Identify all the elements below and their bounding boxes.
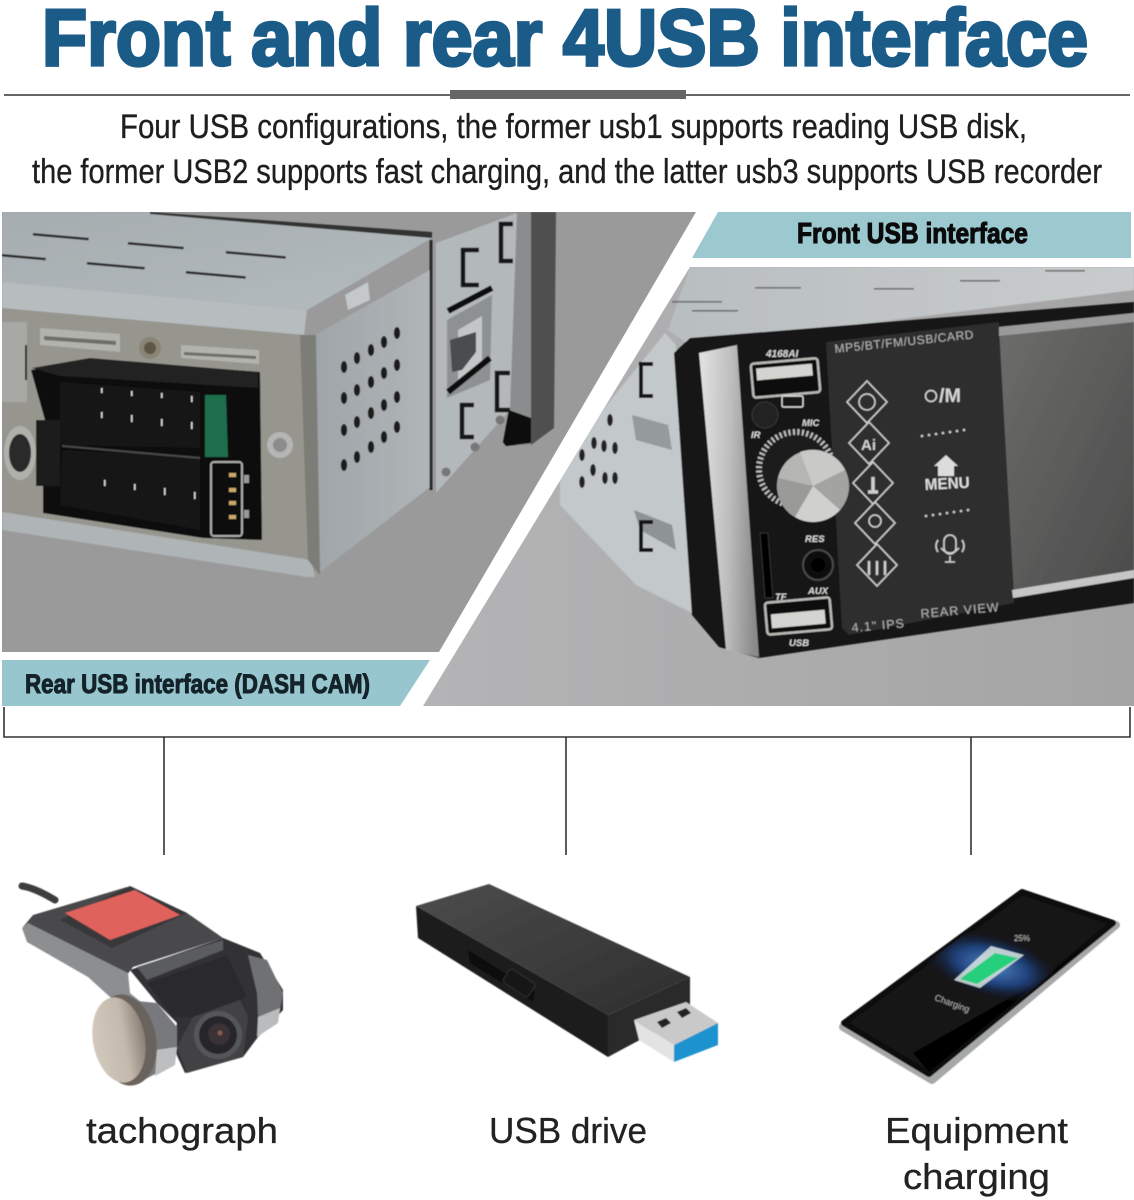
bottom spec text (851, 602, 999, 632)
rear USB port (211, 462, 249, 536)
drive top face (416, 884, 690, 1015)
green fuse (205, 395, 228, 457)
label: equipment charging (885, 1110, 1068, 1197)
model text: MP5/BT/FM/USB/CARD (834, 327, 975, 356)
battery icon (954, 946, 1024, 988)
power / M button: /M (939, 386, 961, 407)
control panel (826, 322, 1014, 635)
panel: rear USB photo (0, 212, 700, 654)
screen reflection (913, 925, 1110, 1072)
labels on front panel: TF (775, 592, 787, 603)
title rule (4, 90, 1130, 99)
label: USB drive: USB drive (489, 1110, 647, 1151)
bottom spec text: 4.1" IPS (851, 616, 905, 635)
bottom spec text: REAR VIEW (920, 600, 1000, 621)
labels on front panel: MIC (802, 418, 820, 429)
mounting bracket (436, 213, 517, 493)
banner: rear USB interface (2, 660, 430, 706)
icon: USB flash drive (416, 884, 718, 1062)
phone screen (844, 892, 1113, 1074)
panel: front USB photo (420, 267, 1134, 707)
drive end face (608, 977, 690, 1057)
dotted separators (921, 429, 969, 517)
camera mount and adhesive pad (22, 886, 223, 1007)
camera body (130, 938, 283, 1073)
banner: front USB interface: Front USB interface (797, 218, 1028, 250)
description text (32, 108, 1102, 191)
icon: dash camera (22, 886, 283, 1091)
chassis lid (2, 212, 432, 335)
labels on front panel: IR (751, 430, 761, 441)
camera cable (22, 886, 55, 900)
battery glow (928, 930, 1056, 1002)
banner: rear USB interface: Rear USB interface (DASH CAM) (25, 669, 370, 699)
silver side strip (699, 345, 759, 657)
camera lens (177, 1000, 248, 1073)
rear face plate (2, 308, 320, 577)
black bezel (674, 302, 1134, 658)
lid of front unit (668, 267, 1134, 345)
label: equipment charging: charging (903, 1156, 1050, 1197)
label: equipment charging: Equipment (885, 1110, 1068, 1151)
diamond touch buttons (847, 381, 897, 586)
sockets (752, 396, 833, 598)
silver dial (86, 989, 164, 1091)
microphone icon (936, 535, 964, 562)
labels on front panel: RES (805, 534, 825, 545)
home and MENU (924, 455, 970, 494)
top USB port (751, 358, 820, 398)
labels on front panel (751, 349, 829, 649)
drive slider (468, 950, 536, 1002)
AI button label: Ai (861, 437, 876, 454)
power / M button (924, 387, 960, 404)
device front seen behind bracket (503, 212, 556, 446)
USB plug (634, 1002, 718, 1062)
labels on front panel: USB (789, 638, 809, 649)
screws (139, 337, 293, 458)
volume knob (756, 429, 849, 522)
home and MENU: MENU (924, 475, 970, 494)
banner: front USB interface (692, 212, 1131, 258)
chassis side panel (560, 333, 692, 613)
labels on front panel: AUX (807, 586, 829, 597)
silver side bands (127, 955, 283, 1082)
drive side face (416, 906, 608, 1057)
icon: smartphone charging (843, 892, 1116, 1080)
battery percent text: 25% (1014, 934, 1030, 943)
chassis side with holes (315, 240, 431, 572)
wiring connector block (31, 358, 262, 540)
labels on front panel: 4168AI (765, 349, 798, 360)
phone body (843, 894, 1116, 1080)
connector lines (4, 707, 1130, 855)
label: tachograph: tachograph (86, 1110, 278, 1151)
display screen (999, 313, 1134, 598)
charging text: Charging (933, 992, 971, 1014)
bottom USB port (765, 597, 832, 635)
